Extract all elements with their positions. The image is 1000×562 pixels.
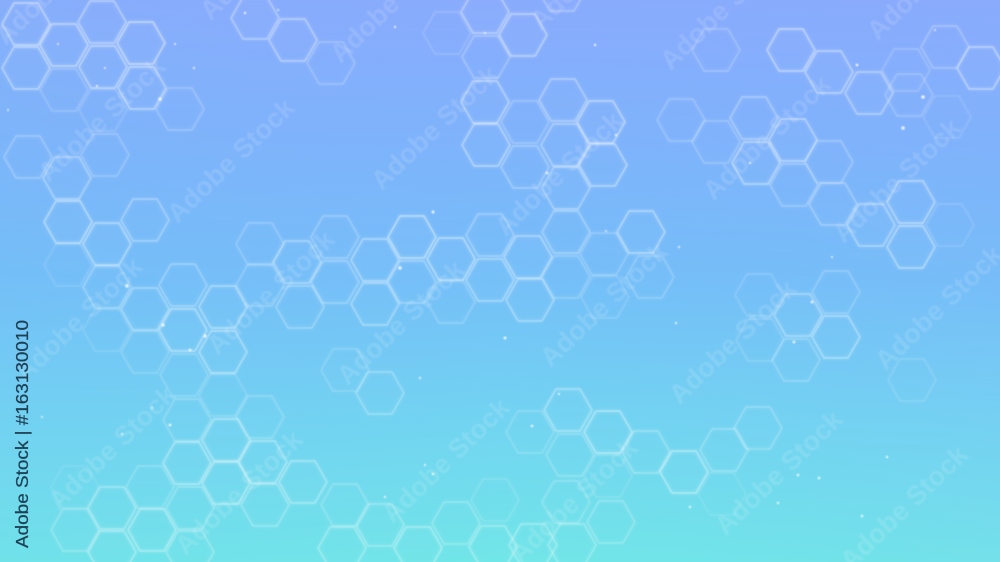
- diagonal watermarks: Adobe Stock: [709, 404, 849, 541]
- diagonal watermarks: Adobe Stock: [827, 112, 967, 249]
- diagonal watermarks: Adobe Stock: [697, 69, 837, 206]
- diagonal watermarks: Adobe Stock: [161, 92, 301, 229]
- diagonal watermarks: Adobe Stock: [365, 59, 505, 196]
- diagonal watermarks: Adobe Stock: [663, 273, 803, 410]
- diagonal watermarks: Adobe Stock: [169, 424, 309, 561]
- diagonal watermarks: Adobe Stock: [331, 254, 471, 391]
- diagonal watermarks: Adobe Stock: [42, 379, 182, 516]
- diagonal watermarks: Adobe Stock: [9, 251, 149, 388]
- stock image id text: Adobe Stock | #163130010: [12, 320, 32, 548]
- diagonal watermarks: Adobe Stock: [489, 105, 629, 242]
- diagonal watermarks: Adobe Stock: [201, 224, 341, 361]
- diagonal watermarks: Adobe Stock: [534, 236, 674, 373]
- diagonal watermarks: Adobe Stock: [32, 51, 172, 188]
- diagonal watermarks: Adobe Stock: [376, 392, 516, 529]
